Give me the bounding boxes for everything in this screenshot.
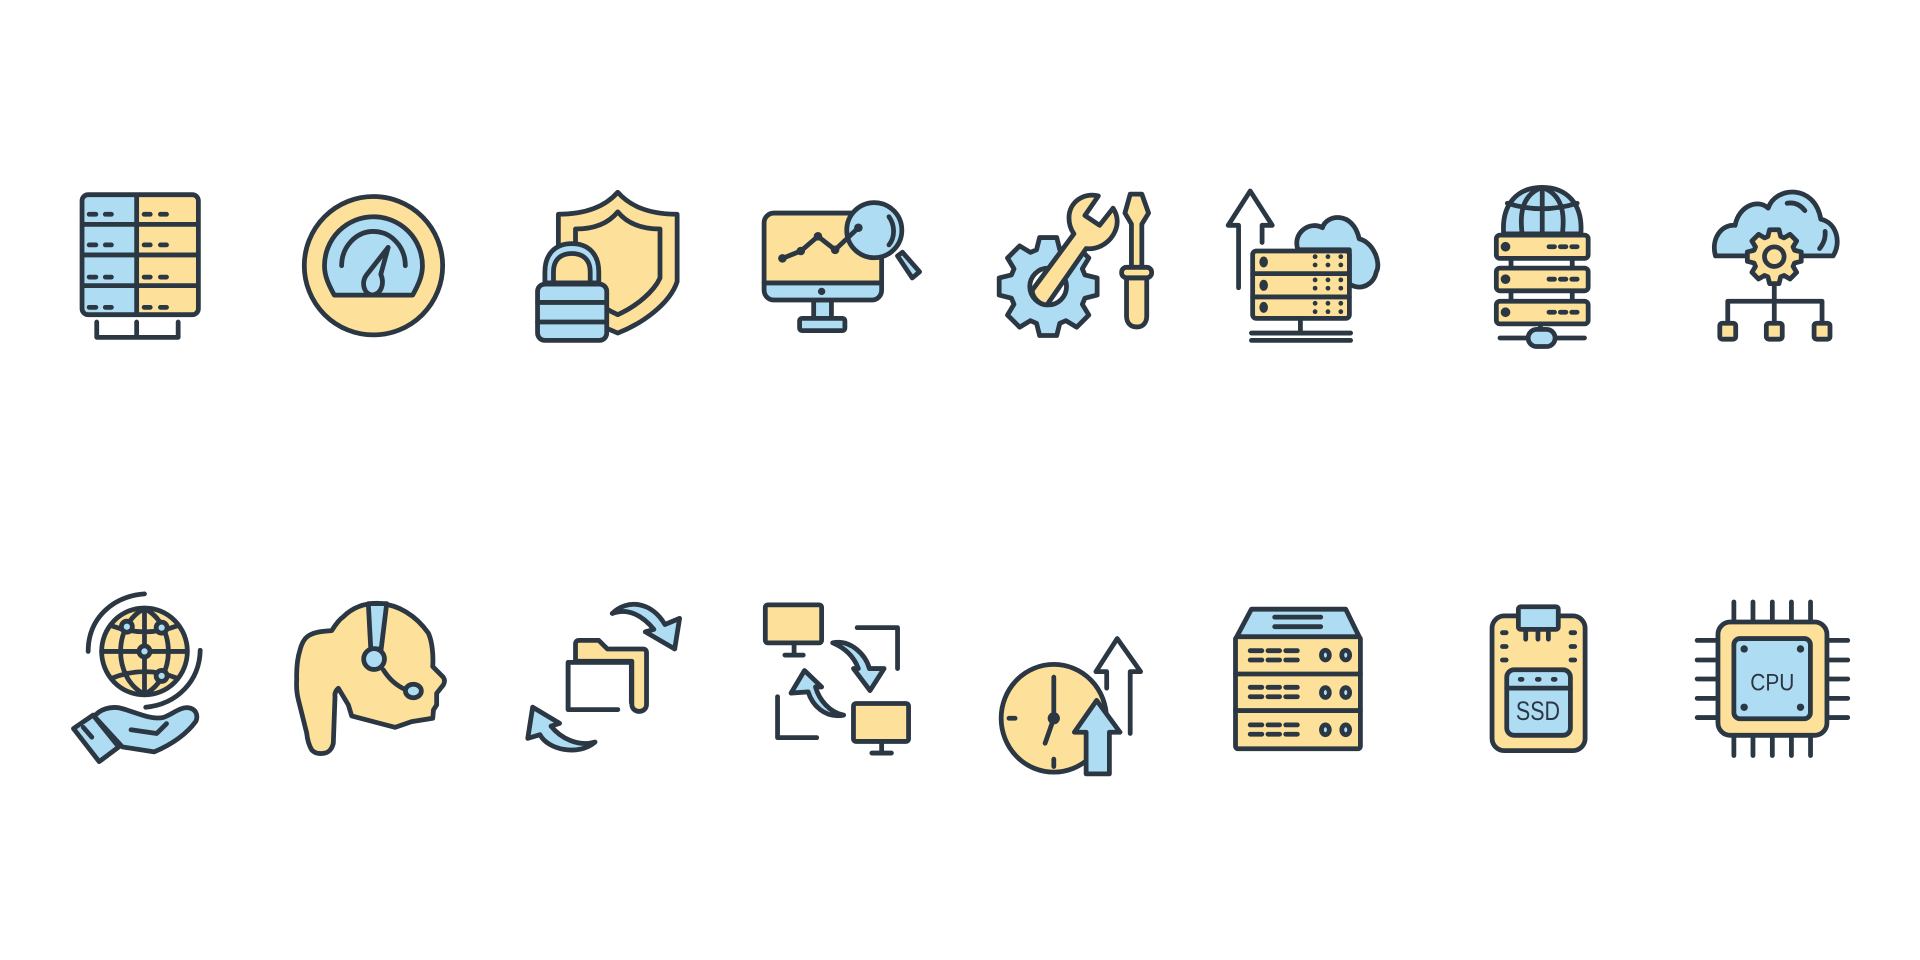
icon: globe on server stack xyxy=(1496,187,1588,347)
icon: monitor with analytics magnifier xyxy=(764,203,920,331)
icon: CPU chip xyxy=(1697,602,1848,756)
icon: cloud gear network xyxy=(1714,192,1837,339)
icon: shield with padlock xyxy=(538,192,677,340)
label: SSD: SSD xyxy=(1516,696,1560,726)
icon: server tower xyxy=(1236,609,1360,749)
icon: globe held in hand xyxy=(73,594,200,762)
icon: gear with wrench and screwdriver xyxy=(999,194,1152,336)
icon: SSD drive xyxy=(1492,607,1585,751)
icon: computers syncing xyxy=(765,605,909,753)
label: CPU: CPU xyxy=(1750,670,1794,697)
icon: folder with sync arrows xyxy=(528,604,680,750)
icon: speedometer gauge xyxy=(304,197,443,335)
icon: cloud server upload xyxy=(1228,191,1378,340)
icon: support agent head with headset xyxy=(297,603,444,754)
icon: server rack xyxy=(82,195,198,337)
icon: clock with speed-up arrows xyxy=(1001,639,1141,774)
